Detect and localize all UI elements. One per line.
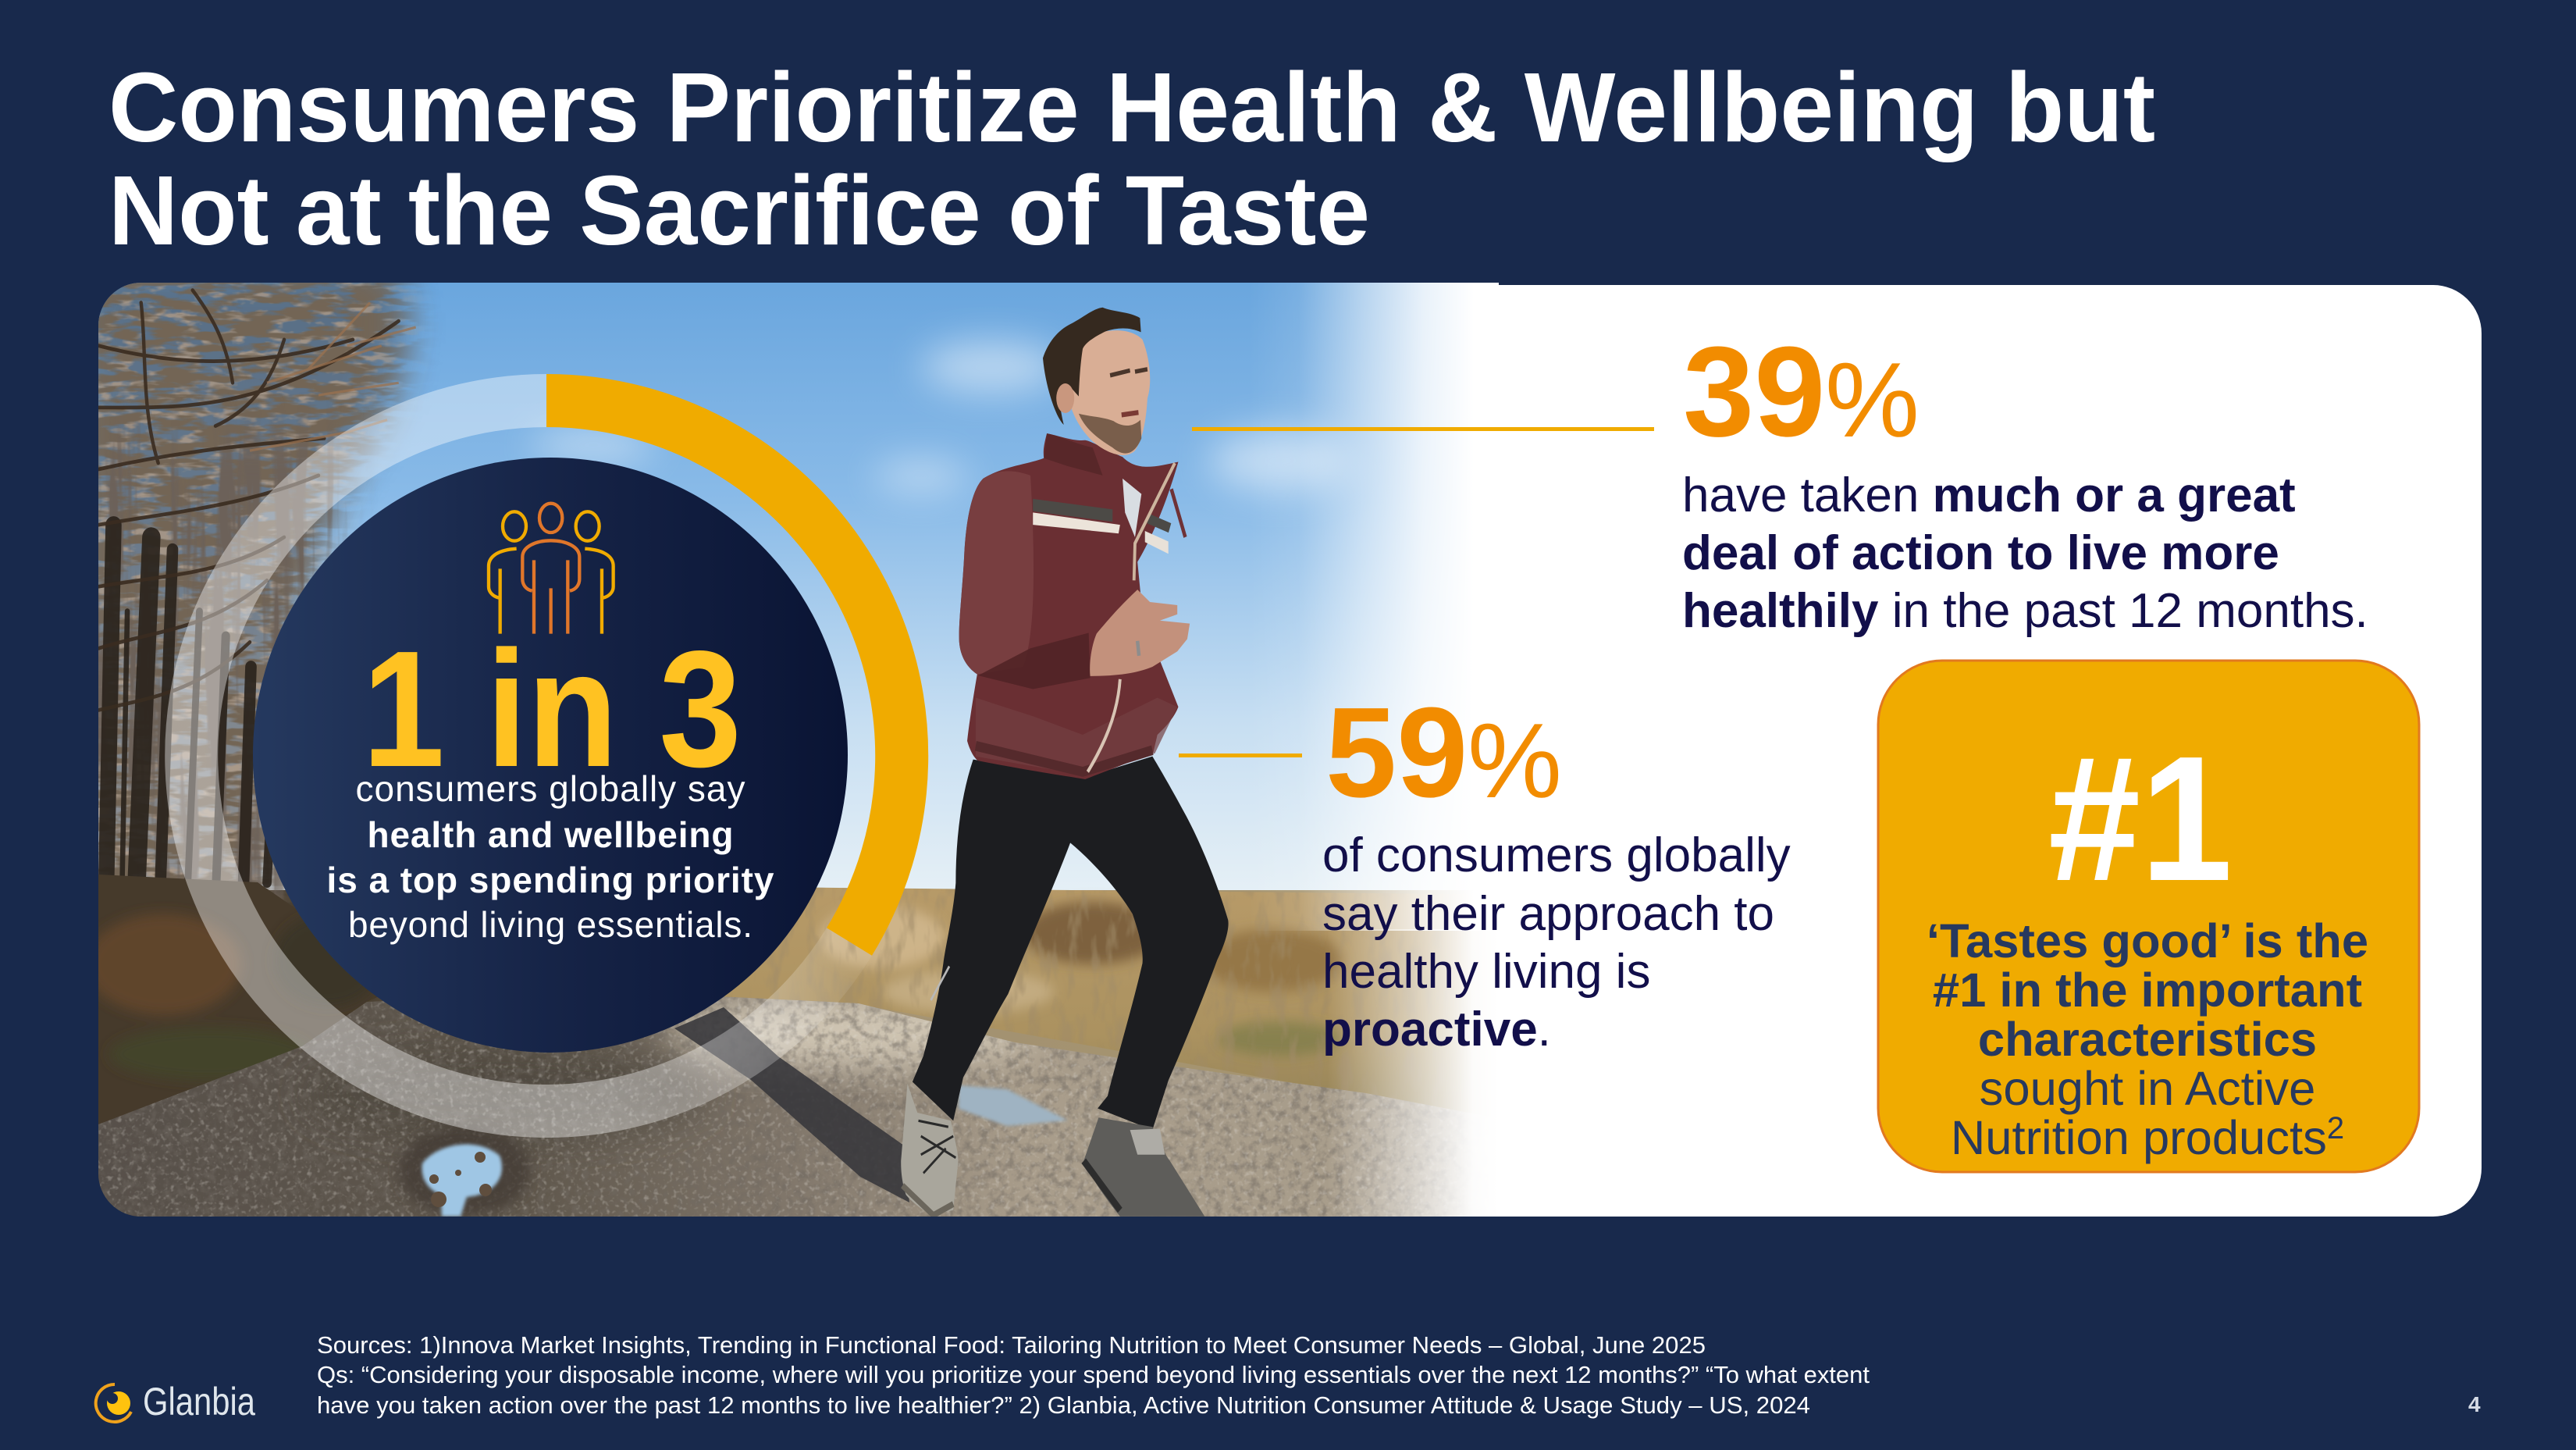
title: Consumers Prioritize Health & Wellbeing but <box>109 52 2155 162</box>
ring highlighted third <box>546 401 902 942</box>
footnote: sources: Sources: 1)Innova Market Insights, Trending in Functional Food: Tailoring Nutrition to Meet Consumer Needs – Global, June 2025 <box>317 1331 1706 1359</box>
text: 39% description: have taken much or a great <box>1682 468 2296 522</box>
text: 39% description: deal of action to live more <box>1682 526 2279 580</box>
callout text: sought in Active <box>1980 1062 2315 1116</box>
stat description: beyond living essentials. <box>348 904 753 945</box>
photo roadside brush <box>98 875 377 1071</box>
text: 59% description: healthy living is <box>1322 945 1650 999</box>
photo puddles <box>398 1085 1068 1217</box>
stat block: 59% <box>1325 681 1562 824</box>
text: 59% description: say their approach to <box>1322 887 1774 941</box>
connector line: 39% <box>1192 427 1654 431</box>
stat description: is a top spending priority <box>326 860 774 900</box>
photo lower white fade <box>1327 929 1499 1217</box>
stat block: 39%: 39 <box>1683 320 1825 463</box>
connector line: 59% <box>1179 754 1302 757</box>
photo forest <box>98 283 434 901</box>
logo: Glanbia: Glanbia <box>143 1380 255 1423</box>
stat: 1 in 3: 1 in 3 <box>362 616 742 801</box>
photo sky <box>98 283 1530 907</box>
photo ground base <box>98 890 1530 1218</box>
callout text: Nutrition products <box>1951 1111 2327 1165</box>
photo grass field <box>724 887 1424 1104</box>
photo: runner on a gravel path <box>78 265 1530 1218</box>
callout text: #1 in the important <box>1933 964 2362 1017</box>
runner legs <box>913 757 1229 1130</box>
callout text: 2 <box>2327 1111 2344 1145</box>
photo white fade <box>1249 283 1499 931</box>
stat description <box>326 768 774 945</box>
photo runner shadow <box>674 1007 909 1202</box>
stat block: 39%: % <box>1825 340 1920 459</box>
text: 59% description <box>1322 828 1791 1056</box>
runner figure <box>901 308 1229 1217</box>
ring: one third progress donut <box>191 401 902 1111</box>
callout text: ‘Tastes good’ is the <box>1927 914 2368 968</box>
panel: navy stat circle <box>253 458 848 1053</box>
panel: white content card <box>98 285 2482 1217</box>
callout number: #1 <box>2048 720 2233 918</box>
text: 59% description: proactive. <box>1322 1003 1551 1056</box>
callout text: characteristics <box>1978 1013 2317 1067</box>
ring remainder <box>191 401 849 1111</box>
text: 39% description: healthily in the past 12 months. <box>1682 584 2368 638</box>
icon: three people <box>489 504 614 634</box>
footnote: sources: Qs: “Considering your disposable income, where will you prioritize your spend beyond living essentials over the next 12 months?” “To what extent <box>317 1361 1870 1388</box>
stat description: health and wellbeing <box>367 814 734 855</box>
stat block: 59%: 59 <box>1325 681 1468 824</box>
runner shoes <box>901 1084 1204 1217</box>
photo gravel road <box>98 996 1453 1217</box>
callout text <box>1927 914 2368 1165</box>
runner head <box>1067 330 1150 455</box>
stat block: 59%: % <box>1468 701 1562 820</box>
title: Not at the Sacrifice of Taste <box>109 155 1370 265</box>
callout: #1 tastes good <box>1878 661 2419 1172</box>
footnote: sources: have you taken action over the past 12 months to live healthier?” 2) Glanbia, Active Nutrition Consumer Attitude & Usage Study – US, 2024 <box>317 1391 1810 1419</box>
stat block: 39% <box>1683 320 1920 463</box>
text: 39% description <box>1682 468 2368 638</box>
runner hand <box>1090 590 1190 676</box>
title <box>109 52 2155 265</box>
page number: 4 <box>2468 1392 2481 1416</box>
text: 59% description: of consumers globally <box>1322 828 1791 882</box>
runner jacket <box>959 433 1178 779</box>
stat description: consumers globally say <box>356 768 745 809</box>
footnote: sources <box>317 1331 1870 1419</box>
logo: Glanbia <box>96 1380 255 1423</box>
